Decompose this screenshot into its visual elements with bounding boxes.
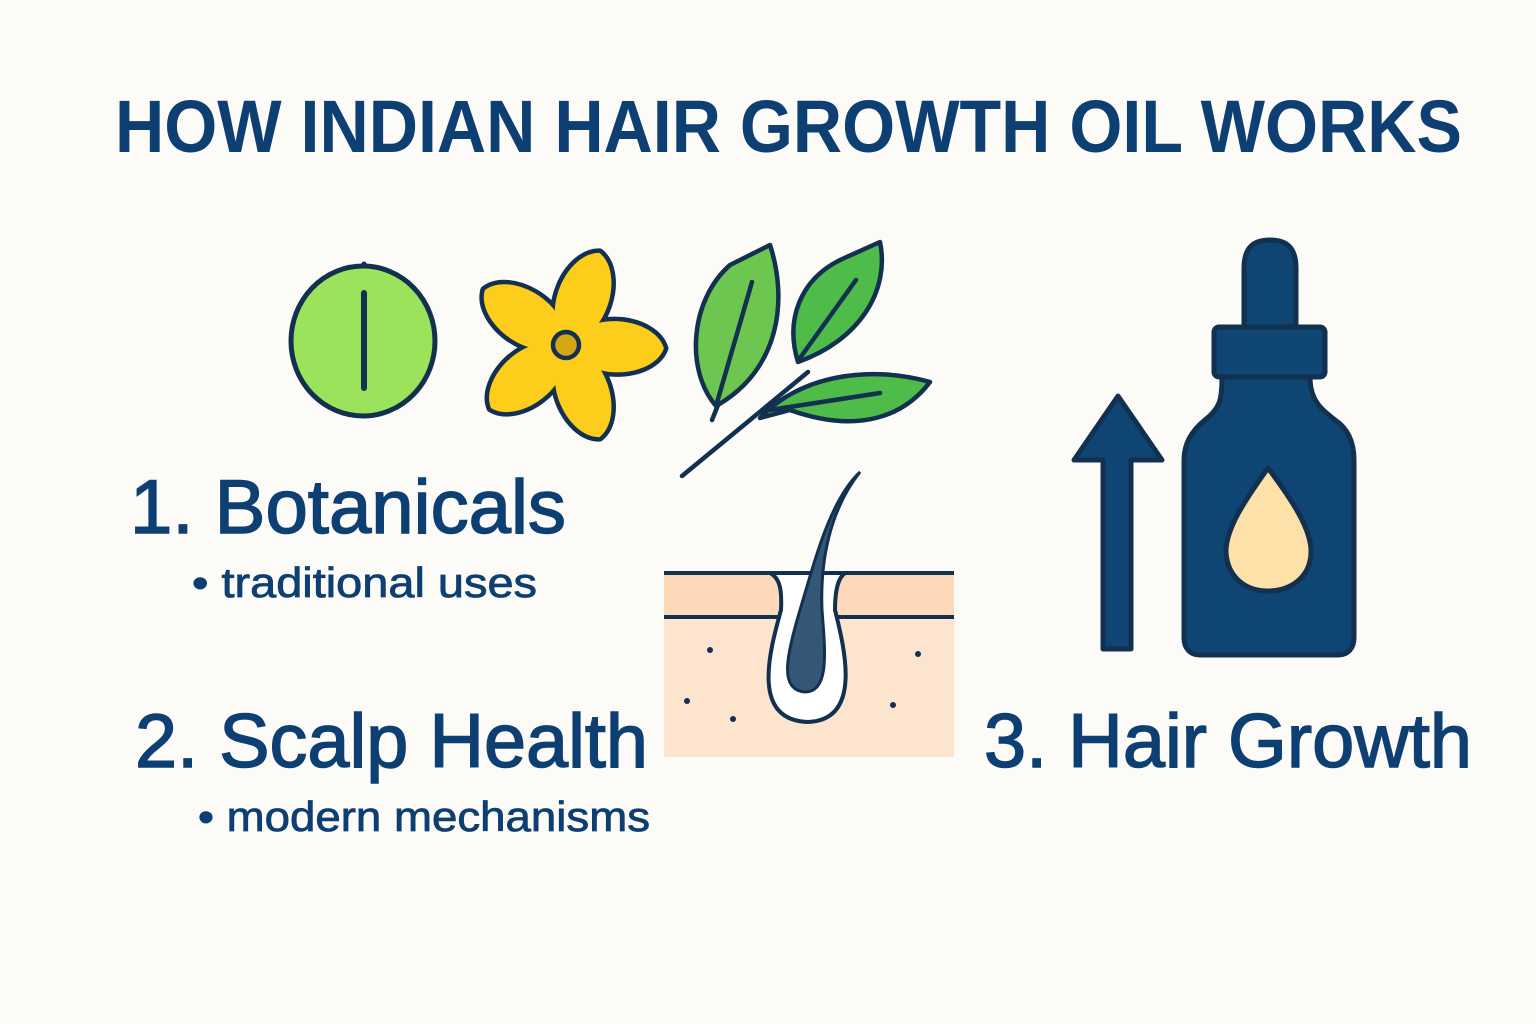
heading: 1. Botanicals: 1. Botanicals <box>130 465 566 550</box>
icon: oil dropper bottle <box>1184 240 1354 655</box>
icon: leaves branch <box>682 242 930 476</box>
icon: scalp cross-section <box>664 472 954 757</box>
arrow: upward growth <box>1074 396 1162 649</box>
icon: amla fruit <box>291 264 435 416</box>
icon: yellow flower <box>470 244 665 446</box>
heading: 2. Scalp Health: 2. Scalp Health <box>135 699 648 784</box>
title: HOW INDIAN HAIR GROWTH OIL WORKS <box>115 85 1462 168</box>
heading: 3. Hair Growth: 3. Hair Growth <box>984 699 1472 784</box>
text: traditional uses: • traditional uses <box>192 559 537 606</box>
text: modern mechanisms: • modern mechanisms <box>198 793 650 840</box>
